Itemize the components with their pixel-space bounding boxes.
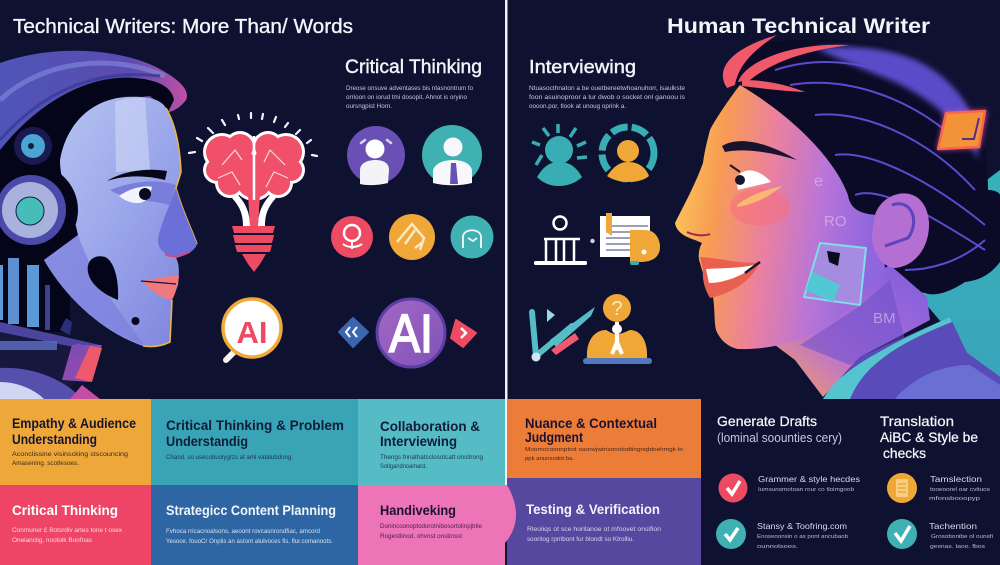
heading: Interviewing [380,434,457,449]
illustration: robot profile [0,51,197,399]
heading: Generate Drafts [717,413,817,429]
item: tachention: Tachention [929,521,977,531]
ghost labels: e [814,173,823,190]
icon: yellow circle [389,214,435,260]
item: stansy [757,521,848,550]
panel: interviewing [529,57,686,364]
item: translation: Tamslection [930,474,982,484]
heading: Critical Thinking [12,502,118,518]
item: translation: tooeoorel oar cvituos [930,487,990,493]
eyebrow [722,141,797,160]
subheading: (lominal soounties cery) [717,430,842,445]
icon: person teal [422,125,482,185]
nose shadow [687,232,710,235]
teal backdrop [920,170,1000,377]
heading: Understanding [12,432,97,447]
item: tachention: Grosobonibe ol ounsfi [931,534,993,540]
robot ear disc [0,164,78,256]
icon: AI badge: AI [389,304,433,364]
body: Oneianclig, nootolk Bonfnas [12,538,92,544]
icon: check and pencil [532,307,595,362]
icon: brain light bulb [189,113,317,272]
icon: AI magnifier [223,299,281,360]
heading: Testing & Verification [526,501,660,517]
pink bulge [505,485,516,543]
body: Conmuner £ Botsrdiv artes tone t osex [12,528,122,534]
rays [189,113,317,156]
icon: teal check [716,519,746,549]
robot eyebrow [107,170,167,181]
body: Aconclissine visinscking stscouncing [12,452,128,458]
icon: blue arrow diamond [339,318,368,347]
body: Fvhoca rricacnoalsons, aeoont rovcasnrondfiac, amcord [166,529,320,535]
body [12,528,122,544]
panel: critical thinking [331,57,494,367]
icon: red arrow diamond [451,320,476,347]
panel: empathy and audience understanding [0,399,151,485]
body [12,452,128,467]
heading: Critical Thinking [345,57,482,78]
description: Dreose onsuve adventases bis ntasnontrum fo [346,86,474,92]
icon: scales [534,216,595,265]
body: Amasening. scotlesoes. [12,461,79,467]
glowing hair clip [937,110,987,150]
heading: Collaboration & [380,419,480,434]
tablet on cheek [804,243,866,305]
blush [730,188,790,226]
robot helmet [0,51,187,158]
shirt [823,317,1000,399]
face [675,85,885,349]
description: oooon.por, tlook at unoug oprink a. [529,104,626,110]
robot nose shadow [158,188,197,258]
item: grammar [758,474,860,493]
item: grammar: Grammer & style hecdes [758,474,860,484]
panel: strategic content planning [151,485,358,565]
panel: generate drafts [716,413,860,550]
description: foon asuinoproor a lur dwob o socket onl ganoou is [529,95,685,101]
icon: document and folder [600,213,660,265]
body: Rogestlinod, ohvnst onstinsst [380,534,462,540]
hair purple sheen [815,47,978,160]
robot face [44,97,197,347]
heading: Judgment [525,430,583,445]
hair [725,40,1000,294]
panel: collaboration and interviewing [358,399,505,485]
title right: Human Technical Writer [667,15,930,38]
panel: translation [880,413,993,550]
body: Thengs fnnathatsclosotcatt onsitrong [380,455,483,461]
heading: Translation [880,413,954,429]
robot collar [0,322,102,399]
heading: AiBC & Style be [880,429,978,445]
panel: testing and verification [505,478,701,565]
body: Donincoonoptodorotnibosortolinpjtrile [380,524,483,530]
panel: nuance and contextual judgment [507,399,701,478]
robot eye [119,186,152,203]
item: stansy: Enoseoonsin o as pont ancubaob [757,534,848,540]
heading: Empathy & Audience [12,416,136,431]
neck [775,265,930,397]
item: tachention [929,521,993,550]
item: stansy: Stansy & Toofring.com [757,521,847,531]
icon: question person [583,294,652,364]
heading: Nuance & Contextual [525,416,657,431]
ghost labels: BM [873,310,896,327]
icon: red check [718,474,748,502]
icon: teal circle [450,216,494,258]
ghost labels: RO [824,213,846,230]
item: stansy: ounnolsoes. [757,544,799,550]
item: translation [929,474,990,502]
body [527,527,661,543]
red hair streak [723,35,850,92]
robot cheek vent [88,256,118,300]
body: Yesoce. fouoCr Onplis an astont atulvoces fis. flur.comanoots. [166,539,333,545]
divider [505,0,508,505]
robot mouth [143,276,179,300]
heading: Interviewing [529,57,636,77]
icon: red circle [331,216,373,258]
robot neck columns [0,252,72,335]
description [346,86,474,110]
icon: person purple [347,126,405,185]
heading: Handiveking [380,502,456,518]
panel: critical thinking red [0,485,151,565]
heading: Understandig [166,433,248,449]
description: orrioon on iorud tmi dosopit. Ahnot is oryino [346,95,468,101]
illustration: human profile [675,35,1000,399]
body [525,447,683,462]
icon: teal person with rays [532,124,587,186]
body: ppk anunsodot.ba. [525,456,575,462]
panel: critical thinking and problem understanding [151,399,358,485]
body: sooritog rpntbont fur blondt so Ktrolliu. [527,537,634,543]
icon: teal check two [887,519,917,549]
description: Ntuasocthnaton a be ouetbereetwhoanuhorr, isaulkste [529,86,686,92]
heading: checks [883,445,926,461]
description: oursngpist Horn. [346,104,392,110]
body [166,529,333,545]
hair strands [775,62,985,270]
icon: yellow doc [887,473,917,503]
ghost labels [814,173,896,327]
title left: Technical Writers: More Than/ Words [13,16,353,38]
heading: Strategicc Content Planning [166,502,336,518]
body: Moomocoonnptrot oaonvjwtnsonntodtingnqtdoehmgk to [525,447,683,453]
item: translation: mfonsbooopyp [929,496,980,502]
eye [736,170,771,190]
item: grammar: Iumsunsmotoan rour co tloimgoob [758,487,854,493]
item: tachention: gesnas. taoo. fbos [930,544,985,550]
icon: AI badge [377,299,445,367]
body: Chand. so usecobuolygrzs at aml vatalubdong. [166,455,293,461]
description [529,86,686,110]
body [380,524,483,540]
heading: Critical Thinking & Problem [166,417,344,433]
body [380,455,483,470]
ear [872,193,929,268]
icon: AI magnifier: AI [236,315,268,350]
icon: question person: ? [611,298,623,320]
robot head interior [0,78,174,330]
body: Sotlgandnoamard. [380,464,427,470]
body: Rleoliqs ot sce horilanoe ot mfoovet onsifion [527,527,661,533]
panel: handiveking [358,485,505,565]
mouth [700,257,760,298]
robot small sensor [14,127,52,165]
icon: ring person [602,127,654,182]
